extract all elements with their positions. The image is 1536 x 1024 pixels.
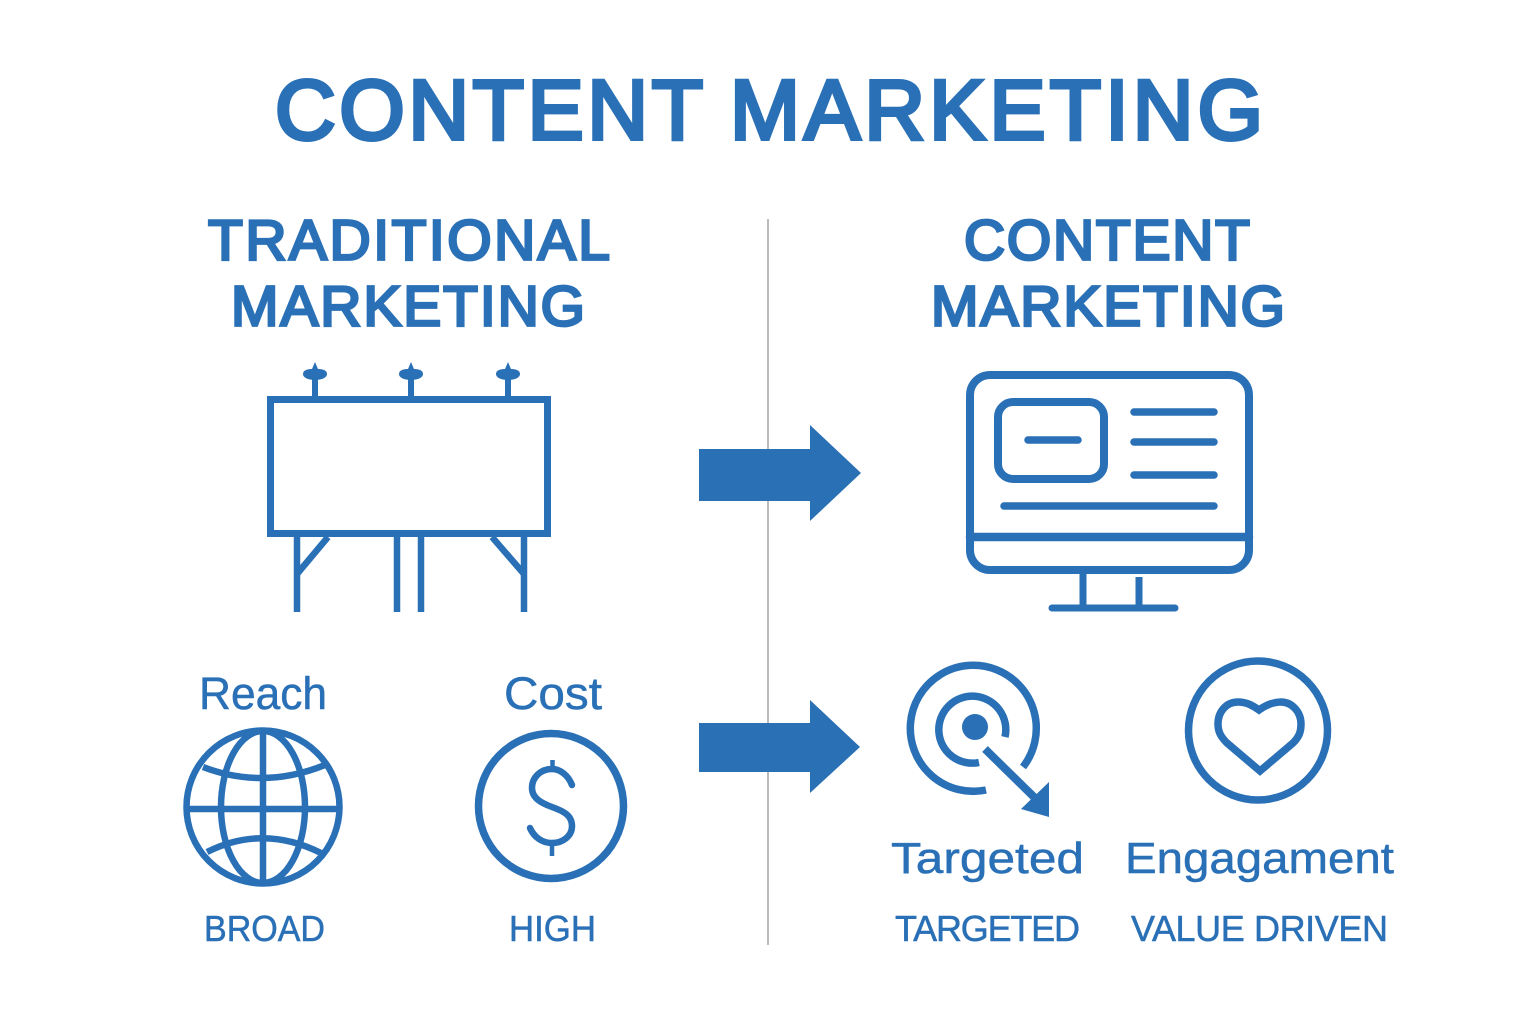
heading: traditional marketing: MARKETING xyxy=(231,275,585,339)
icon: computer monitor with content xyxy=(970,375,1249,608)
icon: globe xyxy=(186,730,340,884)
heading: content marketing xyxy=(931,209,1285,339)
heading: content marketing: MARKETING xyxy=(931,275,1285,339)
label: reach: Reach xyxy=(199,668,327,719)
heading: traditional marketing: TRADITIONAL xyxy=(208,209,610,273)
value: broad: BROAD xyxy=(204,908,325,949)
title xyxy=(275,63,1263,157)
icon: heart in circle xyxy=(1188,661,1328,800)
label: targeted: Targeted xyxy=(891,834,1084,883)
heading: traditional marketing xyxy=(208,209,610,339)
label: cost: Cost xyxy=(504,668,603,719)
value: targeted: TARGETED xyxy=(895,908,1080,949)
title: MARKETING xyxy=(730,63,1263,157)
heading: content marketing: CONTENT xyxy=(964,209,1250,273)
title: CONTENT xyxy=(275,63,703,157)
icon: target with arrow xyxy=(910,665,1049,817)
arrow: bottom xyxy=(699,700,860,793)
icon: dollar coin xyxy=(478,734,624,878)
icon: billboard xyxy=(270,362,548,612)
value: value driven: VALUE DRIVEN xyxy=(1131,908,1388,949)
arrow: top xyxy=(699,425,861,521)
value: high: HIGH xyxy=(509,908,596,949)
label: engagament: Engagament xyxy=(1125,834,1394,883)
